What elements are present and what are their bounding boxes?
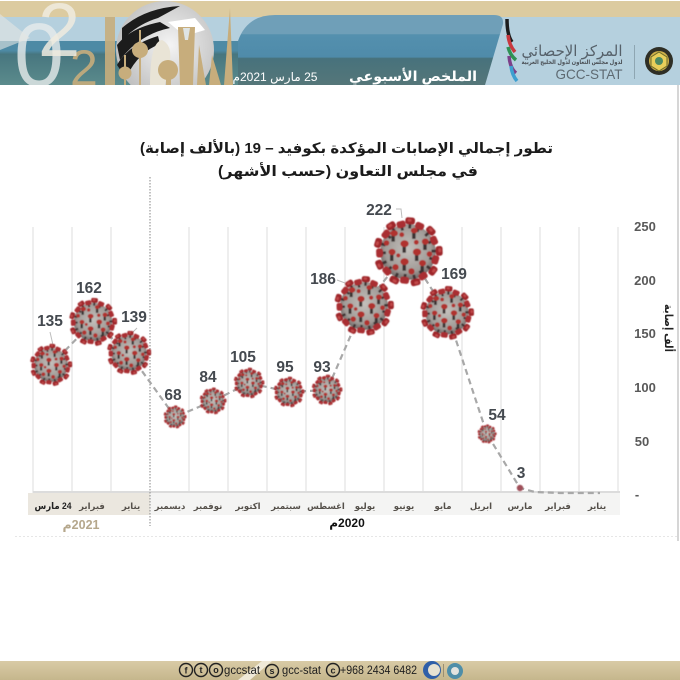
y axis values: 50 [635, 434, 649, 449]
data labels: 162 [76, 280, 102, 297]
footer band: t [200, 665, 202, 675]
data labels: 139 [121, 309, 147, 326]
logo text: statistical centre: لدول مجلس التعاون لدول الخليج العربية [522, 59, 622, 66]
month labels: فبراير [78, 502, 105, 512]
y axis title: ألف إصابة [662, 304, 676, 352]
social icons [180, 664, 340, 678]
data labels: 135 [37, 313, 63, 330]
header skyline [118, 8, 233, 85]
data labels: 105 [230, 349, 256, 366]
month labels: ابريل [470, 502, 492, 512]
data labels: 54 [488, 407, 506, 424]
footer band: f [184, 666, 188, 676]
icon: GCC emblem [645, 47, 673, 75]
data labels [37, 202, 526, 482]
chart title: تطور إجمالي الإصابات المؤكدة بكوفيد – 19 (بالألف إصابة) [140, 139, 553, 157]
month labels: 24 مارس [34, 501, 72, 512]
header date: 25 مارس 2021م [232, 70, 318, 85]
chart: confirmed cases by month [28, 177, 676, 533]
month labels: اكتوبر [234, 502, 261, 512]
icon: partner logos [423, 661, 463, 679]
chart title: في مجلس التعاون (حسب الأشهر) [218, 162, 478, 180]
category band [28, 491, 620, 515]
trend line [51, 252, 600, 493]
data labels: 93 [313, 359, 331, 376]
data labels: 68 [164, 387, 182, 404]
contact text [224, 665, 417, 677]
header year graphic: 2 [70, 40, 98, 96]
header globe [116, 1, 214, 85]
logo text: statistical centre [522, 44, 622, 79]
contact text: +968 2434 6482 [340, 665, 417, 677]
icon: flag ribbon [507, 19, 517, 81]
year label 2020: 2020م [329, 516, 365, 531]
footer band: s [269, 666, 275, 676]
divider 2020 and 2021 [149, 177, 151, 526]
header weekly summary title: الملخص الأسبوعي [349, 68, 477, 85]
footer band: o [213, 665, 219, 675]
month labels: يناير [587, 502, 606, 512]
header blue panel [238, 15, 503, 85]
month labels: اغسطس [307, 502, 345, 512]
footer band [0, 661, 680, 680]
footer band: c [330, 666, 336, 676]
header year graphic: 0 [14, 6, 64, 106]
month labels: يوليو [354, 502, 375, 512]
header banner [0, 1, 680, 85]
month labels: مارس [507, 502, 533, 512]
data labels: 169 [441, 266, 467, 283]
data labels: 84 [199, 369, 217, 386]
month labels: يونيو [393, 502, 414, 512]
header year graphic [18, 3, 115, 85]
contact text: gcc-stat [282, 665, 322, 677]
y axis values: - [635, 487, 639, 502]
y axis values: 150 [634, 326, 656, 341]
month labels: يناير [121, 502, 140, 512]
month labels: فبراير [544, 502, 571, 512]
virus markers [30, 217, 523, 491]
logo text: statistical centre: GCC-STAT [556, 66, 623, 82]
chart title [140, 139, 553, 180]
y axis values: 200 [634, 273, 656, 288]
data labels: 222 [366, 202, 392, 219]
data labels: 3 [517, 465, 526, 482]
month labels: مايو [434, 502, 451, 512]
data labels: 95 [276, 359, 294, 376]
leader lines [50, 209, 402, 345]
year label 2021: 2021م [63, 518, 100, 533]
y axis values [634, 219, 656, 502]
month labels: نوفمبر [193, 502, 222, 512]
logo text: statistical centre: المركز الإحصائي [522, 43, 622, 61]
contact text: gccstat [224, 665, 261, 677]
data labels: 186 [310, 271, 336, 288]
month labels: ديسمبر [154, 502, 186, 512]
month labels [34, 501, 606, 512]
y axis values: 100 [634, 380, 656, 395]
month labels: سبتمبر [270, 502, 301, 512]
y axis values: 250 [634, 219, 656, 234]
